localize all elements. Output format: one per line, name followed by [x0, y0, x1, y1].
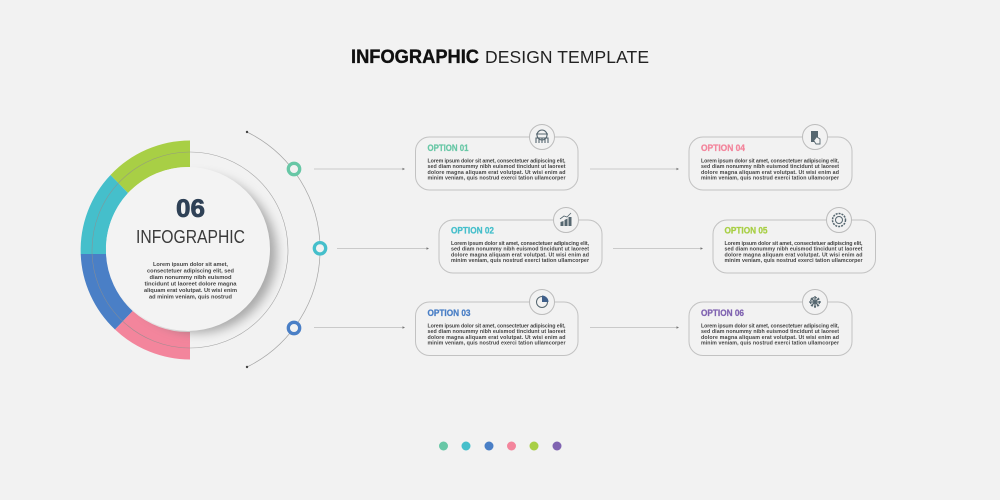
centre text: diam nonummy nibh euismod	[150, 275, 232, 281]
centre heading: INFOGRAPHIC	[136, 227, 245, 247]
icon: pie chart	[536, 296, 548, 308]
panel: option 03	[416, 290, 578, 356]
centre text: ad minim veniam, quis nostrud	[149, 294, 232, 300]
centre text: Lorem ipsum dolor sit amet,	[153, 262, 228, 268]
body text	[701, 324, 840, 347]
title: DESIGN TEMPLATE	[485, 47, 649, 67]
thin ring around centre	[92, 152, 288, 348]
outer arc with markers	[246, 131, 326, 368]
icon: growth chart	[560, 213, 572, 226]
body text: sed diam nonummy nibh euismod tincidunt ut laoreet	[428, 164, 566, 170]
segment: teal	[81, 175, 128, 254]
body text: sed diam nonummy nibh euismod tincidunt ut laoreet	[701, 164, 839, 170]
centre text: aliquam erat volutpat. Ut wisi enim	[144, 288, 237, 294]
donut chart with six coloured segments	[81, 140, 288, 360]
panel: option 01	[416, 124, 578, 190]
marker: blue	[288, 322, 300, 334]
title	[351, 47, 649, 68]
icon: network globe	[809, 296, 821, 308]
heading: OPTION 06	[701, 308, 744, 318]
centre number: 06	[176, 195, 205, 223]
segment: blue	[81, 254, 133, 330]
body text: Lorem ipsum dolor sit amet, consectetuer adipiscing elit,	[428, 324, 566, 330]
body text: Lorem ipsum dolor sit amet, consectetuer adipiscing elit,	[701, 158, 840, 164]
segment: pink	[115, 311, 190, 360]
centre text: tincidunt ut laoreet dolore magna	[144, 282, 237, 288]
body text	[724, 241, 863, 264]
body text: sed diam nonummy nibh euismod tincidunt ut laoreet	[428, 329, 566, 335]
body text: minim veniam, quis nostrud exerci tation ullamcorper	[701, 176, 839, 182]
heading: OPTION 02	[451, 226, 494, 236]
body text: dolore magna aliquam erat volutpat. Ut wisi enim ad	[701, 335, 839, 341]
body text: dolore magna aliquam erat volutpat. Ut wisi enim ad	[428, 335, 566, 341]
body text: dolore magna aliquam erat volutpat. Ut wisi enim ad	[428, 170, 566, 176]
centre text	[144, 262, 237, 300]
body text	[428, 324, 566, 347]
body text: Lorem ipsum dolor sit amet, consectetuer adipiscing elit,	[451, 241, 590, 247]
body text: dolore magna aliquam erat volutpat. Ut wisi enim ad	[451, 252, 589, 258]
body text: minim veniam, quis nostrud exerci tation ullamcorper	[428, 341, 566, 347]
marker: mint	[288, 163, 300, 175]
body text: minim veniam, quis nostrud exerci tation ullamcorper	[451, 258, 589, 264]
body text: Lorem ipsum dolor sit amet, consectetuer adipiscing elit,	[724, 241, 863, 247]
body text: dolore magna aliquam erat volutpat. Ut wisi enim ad	[701, 170, 839, 176]
panel: option 05	[713, 208, 876, 273]
heading: OPTION 05	[724, 226, 768, 236]
heading: OPTION 04	[701, 143, 746, 153]
body text: dolore magna aliquam erat volutpat. Ut wisi enim ad	[724, 252, 862, 258]
colour dots legend	[439, 442, 562, 450]
body text	[701, 158, 840, 182]
title: INFOGRAPHIC	[351, 47, 479, 68]
centre text: consectetuer adipiscing elit, sed	[147, 268, 234, 274]
heading: OPTION 03	[428, 308, 470, 318]
heading: OPTION 01	[428, 143, 468, 153]
icon: bank building	[536, 130, 548, 143]
segment: green	[110, 140, 190, 193]
panel: option 04	[689, 124, 852, 190]
body text	[428, 158, 566, 182]
body text: Lorem ipsum dolor sit amet, consectetuer adipiscing elit,	[701, 324, 840, 330]
panel: option 06	[689, 290, 852, 356]
body text: minim veniam, quis nostrud exerci tation ullamcorper	[428, 176, 566, 182]
body text: minim veniam, quis nostrud exerci tation ullamcorper	[724, 258, 862, 264]
body text: Lorem ipsum dolor sit amet, consectetuer adipiscing elit,	[428, 158, 566, 164]
body text	[451, 241, 590, 264]
arrows from markers to cards	[314, 168, 703, 329]
centre disc	[106, 167, 270, 331]
marker: teal	[314, 243, 326, 254]
body text: sed diam nonummy nibh euismod tincidunt ut laoreet	[451, 247, 589, 253]
body text: sed diam nonummy nibh euismod tincidunt ut laoreet	[701, 329, 839, 335]
centre disc shadow	[119, 175, 277, 333]
panel: option 02	[439, 208, 602, 273]
body text: sed diam nonummy nibh euismod tincidunt ut laoreet	[724, 247, 863, 253]
body text: minim veniam, quis nostrud exerci tation ullamcorper	[701, 341, 839, 347]
icon: document with hand	[811, 131, 820, 144]
icon: concentric gear	[832, 214, 846, 226]
